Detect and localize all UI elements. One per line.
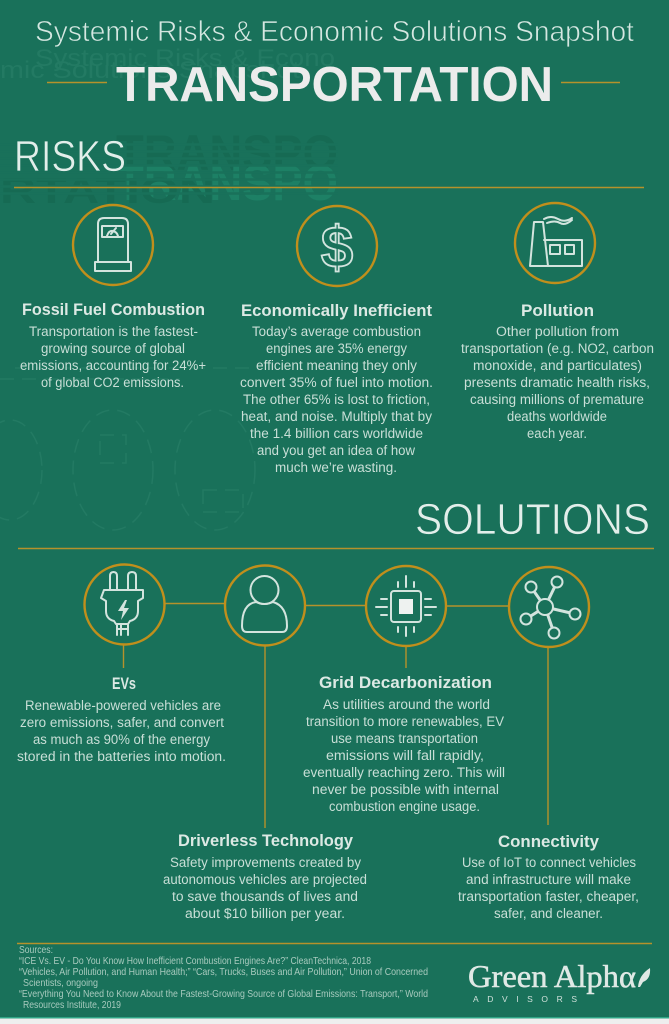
panel: grid decarbonization: combustion engine usage.	[329, 799, 480, 814]
logo: green alpha advisors: ADVISORS	[473, 994, 577, 1004]
heading: solutions: SOLUTIONS	[415, 495, 650, 544]
connector lines between solutions	[124, 604, 548, 828]
sources: Resources Institute, 2019	[23, 999, 121, 1011]
ghost artifacts behind the header	[0, 45, 338, 211]
icon: electric plug	[84, 564, 164, 644]
icon: dollar sign: $	[321, 215, 353, 280]
panel: grid decarbonization: never be possible with internal	[312, 782, 499, 797]
sources: Scientists, ongoing	[23, 977, 98, 989]
panel: fossil fuel combustion: of global CO2 emissions.	[41, 375, 184, 390]
sources	[19, 944, 428, 1011]
panel: economically inefficient: much we’re wasting.	[275, 460, 397, 475]
icon: network nodes	[509, 567, 589, 647]
panel: pollution: Pollution	[521, 301, 594, 320]
panel: evs: EVs	[112, 674, 136, 693]
panel: driverless technology: about $10 billion per year.	[185, 906, 345, 921]
title: Systemic Risks & Economic Solutions Snapshot	[35, 16, 634, 48]
panel: economically inefficient	[240, 206, 433, 475]
panel: pollution: presents dramatic health risks,	[464, 375, 650, 390]
sources: “Everything You Need to Know About the Fastest-Growing Source of Global Emissions: Transport,” World	[19, 988, 428, 1000]
ghost artifacts behind the header: TRANSPO	[116, 155, 338, 211]
panel: evs: Renewable-powered vehicles are	[25, 698, 221, 713]
panel: economically inefficient: and you get an idea of how	[257, 443, 415, 458]
icon: fuel pump	[73, 205, 153, 285]
panel: grid decarbonization	[303, 566, 505, 814]
ghost artifacts behind the header: RTATION	[0, 170, 215, 211]
panel: connectivity	[458, 567, 639, 921]
panel: economically inefficient: The other 65% is lost to friction,	[243, 392, 430, 407]
sources: “Vehicles, Air Pollution, and Human Health;” “Cars, Trucks, Buses and Air Pollution,” Union of Concerned	[19, 966, 428, 978]
ghost artifacts behind the header: Systemic Risks & Econo	[35, 45, 335, 72]
icon: person	[225, 566, 305, 646]
panel: grid decarbonization: transition to more renewables, EV	[306, 714, 504, 729]
panel: pollution: each year.	[527, 426, 587, 441]
ghost artifacts behind the header: TRANSPO	[116, 125, 338, 181]
panel: economically inefficient: Today’s average combustion	[252, 324, 421, 339]
panel: fossil fuel combustion	[20, 205, 206, 390]
icon: factory	[515, 203, 595, 283]
heading: transportation: TRANSPORTATION	[116, 58, 553, 112]
panel: driverless technology: autonomous vehicles are projected	[163, 872, 367, 887]
icon: dollar sign	[297, 206, 377, 286]
panel: fossil fuel combustion: Fossil Fuel Combustion	[22, 300, 205, 319]
heading: risks: RISKS	[14, 132, 126, 181]
panel: economically inefficient: efficient meaning they only	[256, 358, 417, 373]
logo: green alpha advisors: Green Alphα	[468, 958, 636, 994]
panel: connectivity: Connectivity	[498, 832, 600, 851]
panel: pollution: transportation (e.g. NO2, carbon	[461, 341, 654, 356]
panel: grid decarbonization: eventually reaching zero. This will	[303, 765, 505, 780]
panel: driverless technology: Safety improvements created by	[170, 855, 361, 870]
icon: microchip	[366, 566, 446, 646]
panel: economically inefficient: Economically Inefficient	[241, 301, 432, 320]
panel: connectivity: Use of IoT to connect vehicles	[462, 855, 636, 870]
panel: driverless technology	[163, 566, 367, 921]
panel: connectivity: safer, and cleaner.	[494, 906, 603, 921]
panel: evs: stored in the batteries into motion.	[17, 749, 226, 764]
panel: pollution: monoxide, and particulates)	[473, 358, 642, 373]
panel: grid decarbonization: Grid Decarbonization	[319, 673, 492, 692]
panel: fossil fuel combustion: emissions, accounting for 24%+	[20, 358, 206, 373]
panel: economically inefficient: convert 35% of fuel into motion.	[240, 375, 433, 390]
panel: economically inefficient: heat, and noise. Multiply that by	[241, 409, 432, 424]
panel: grid decarbonization: use means transportation	[331, 731, 478, 746]
ghost artifacts behind the risks text	[0, 368, 260, 530]
sources: Sources:	[19, 944, 53, 956]
panel: connectivity: transportation faster, cheaper,	[458, 889, 639, 904]
panel: pollution: causing millions of premature	[470, 392, 644, 407]
panel: grid decarbonization: As utilities around the world	[323, 697, 490, 712]
panel: fossil fuel combustion: growing source of global	[41, 341, 185, 356]
panel: evs	[17, 564, 226, 764]
panel: evs: as much as 90% of the energy	[33, 732, 210, 747]
panel: connectivity: and infrastructure will make	[466, 872, 631, 887]
panel: economically inefficient: the 1.4 billion cars worldwide	[250, 426, 423, 441]
panel: pollution: Other pollution from	[496, 324, 619, 339]
panel: driverless technology: to save thousands of lives and	[172, 889, 358, 904]
panel: economically inefficient: engines are 35% energy	[266, 341, 407, 356]
sources: “ICE Vs. EV - Do You Know How Inefficient Combustion Engines Are?” CleanTechnica, 2018	[19, 955, 371, 967]
panel: driverless technology: Driverless Technology	[178, 831, 354, 850]
panel: grid decarbonization: emissions will fall rapidly,	[326, 748, 484, 763]
ghost artifacts behind the header: mic Solutions Snapshot	[0, 57, 300, 84]
panel: evs: zero emissions, safer, and convert	[20, 715, 224, 730]
panel: fossil fuel combustion: Transportation is the fastest-	[29, 324, 198, 339]
panel: pollution: deaths worldwide	[507, 409, 607, 424]
panel: pollution	[461, 203, 654, 441]
